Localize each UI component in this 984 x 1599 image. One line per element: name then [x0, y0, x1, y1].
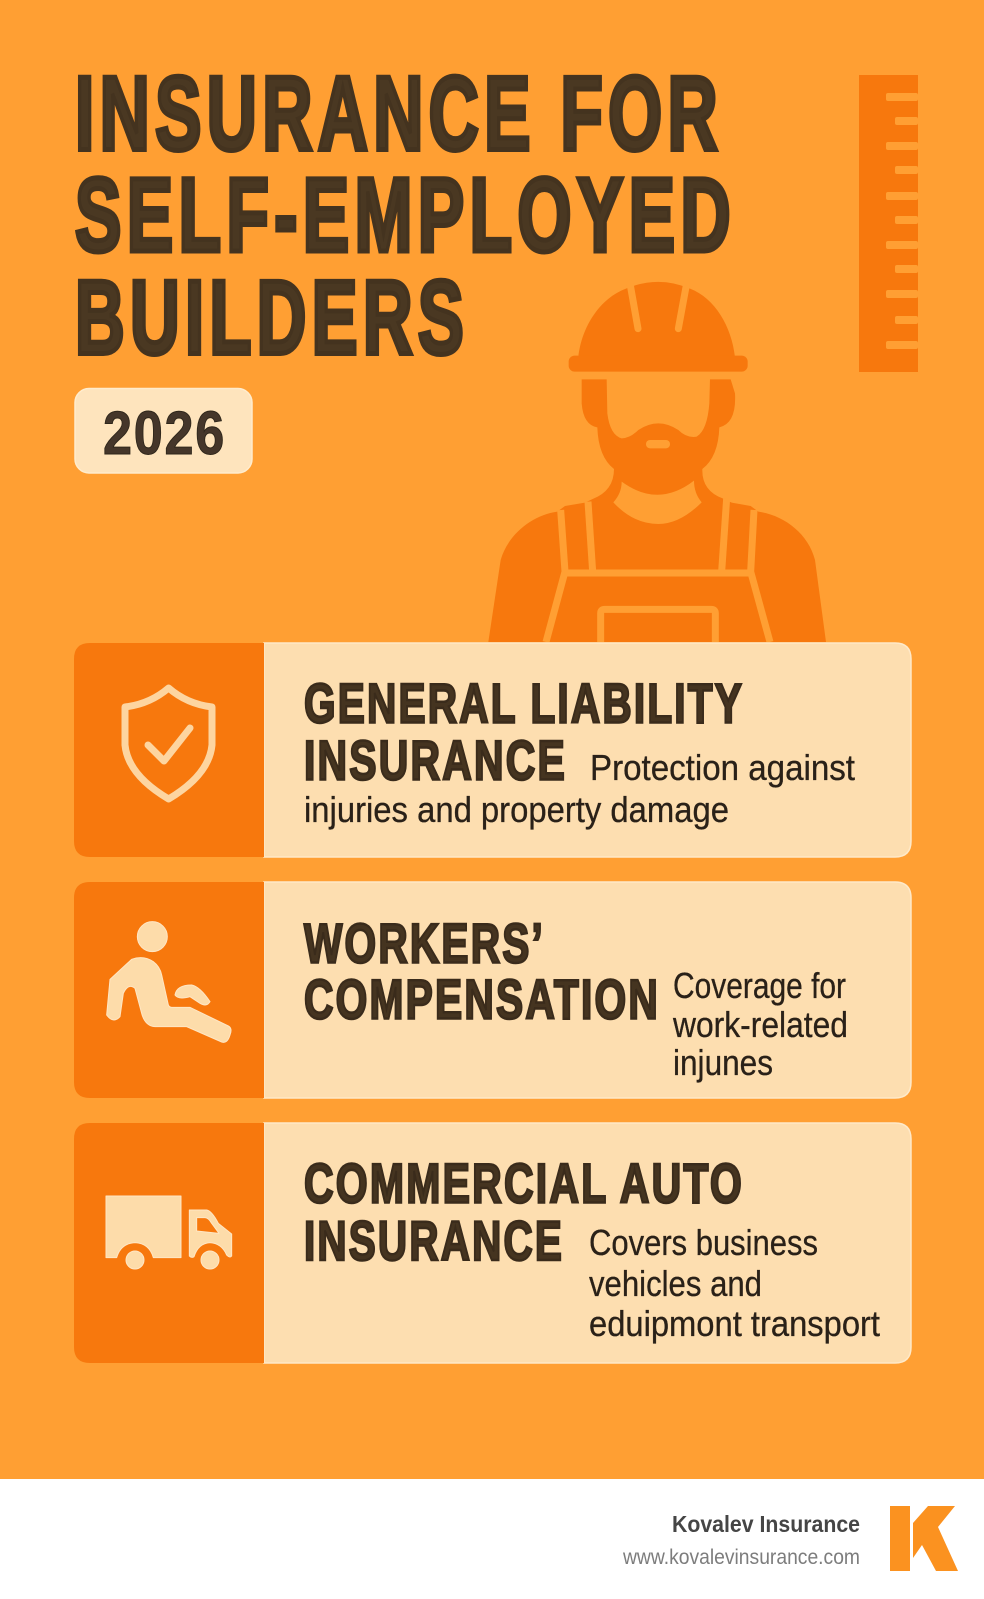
- icon: shield with check: [125, 688, 212, 799]
- card body: [264, 643, 911, 857]
- title: BUILDERS: [75, 260, 469, 377]
- logo: K: [890, 1506, 958, 1571]
- description: [589, 1222, 880, 1344]
- icon panel: [74, 1123, 264, 1363]
- heading: INSURANCE: [304, 1209, 564, 1272]
- icon: injured worker: [107, 922, 231, 1042]
- icon: ruler: [859, 75, 918, 372]
- description: injunes: [673, 1042, 773, 1083]
- description: Protection against: [590, 747, 855, 788]
- panel: workers' compensation: [74, 882, 911, 1098]
- description: eduipmont transport: [589, 1303, 880, 1344]
- panel: commercial auto insurance: [74, 1123, 911, 1363]
- website: www.kovalevinsurance.com: [622, 1546, 860, 1569]
- illustration: bearded construction worker: [488, 282, 826, 642]
- icon panel: [74, 882, 264, 1098]
- description: Covers business: [589, 1222, 818, 1263]
- heading: COMMERCIAL AUTO: [304, 1152, 744, 1215]
- title: [75, 56, 736, 377]
- description: [672, 965, 848, 1083]
- description: Coverage for: [673, 965, 846, 1006]
- description: vehicles and: [589, 1263, 762, 1304]
- company name: Kovalev Insurance: [672, 1511, 860, 1537]
- description: work-related: [672, 1004, 848, 1045]
- heading: [304, 1152, 744, 1272]
- year badge: 2026: [103, 399, 226, 467]
- description: injuries and property damage: [304, 789, 729, 830]
- heading: INSURANCE: [304, 728, 567, 792]
- description: [304, 747, 855, 830]
- panel: general liability insurance: [74, 643, 911, 857]
- heading: GENERAL LIABILITY: [304, 672, 744, 735]
- year badge: [75, 388, 252, 473]
- heading: WORKERS’: [304, 912, 545, 975]
- heading: COMPENSATION: [304, 968, 660, 1031]
- footer: [0, 1479, 984, 1599]
- heading: [304, 912, 660, 1031]
- icon panel: [74, 643, 264, 857]
- icon: truck: [106, 1196, 232, 1269]
- card body: [264, 1123, 911, 1363]
- card body: [264, 882, 911, 1098]
- heading: [304, 672, 744, 792]
